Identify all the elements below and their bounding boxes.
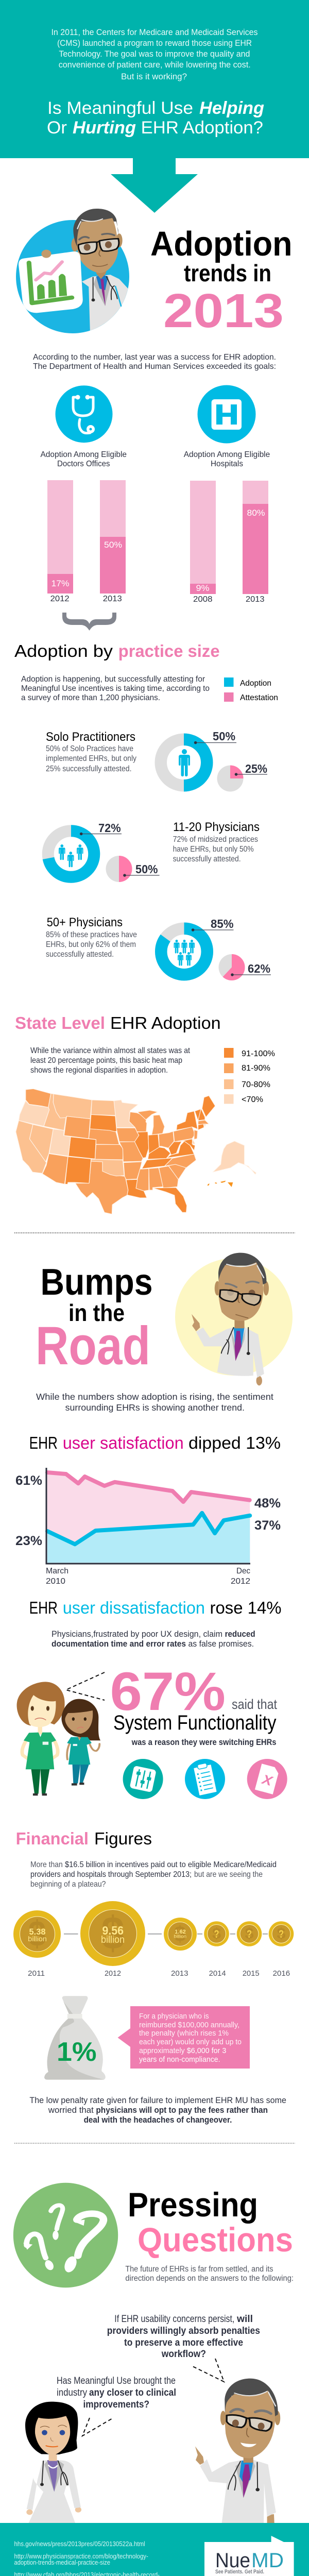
text: question one: If EHR usability concerns persist, xyxy=(114,2314,234,2325)
text: financial intro: More than xyxy=(30,1860,63,1869)
callout pointer: question two xyxy=(82,2418,113,2436)
callout: penalty example xyxy=(117,2006,250,2069)
icon: frowning doctor xyxy=(175,1253,293,1385)
logo: NueMD speech bubble xyxy=(204,2536,294,2576)
text: adoption intro: The Department of Health and Human Services exceeded its goals: xyxy=(33,362,276,371)
coin: 2011: billion xyxy=(28,1935,47,1943)
coin: 2012: billion xyxy=(101,1935,125,1945)
logo: NueMD speech bubble: See Patients. Get Paid. xyxy=(215,2569,264,2575)
coin: 2015: ? xyxy=(247,1928,252,1940)
coin: 2011: $ xyxy=(28,1913,46,1954)
bar chart: hospitals: 2013 xyxy=(246,595,265,604)
chart: 11-20 donut and pie: 72% xyxy=(98,821,121,835)
heading: user satisfaction dipped 13% xyxy=(29,1433,281,1452)
panel: 11-20 physicians xyxy=(48,820,260,882)
brace xyxy=(62,613,116,631)
coin: 2016 xyxy=(269,1921,294,1946)
coin: 2013: billion xyxy=(174,1934,186,1939)
text: practice size intro: Meaningful Use incentives is taking time, according to xyxy=(21,684,210,693)
text: 50+: 85% of these practices have xyxy=(46,930,137,939)
coin: 2011: 5.38 xyxy=(29,1927,45,1937)
coin year labels: 2015 xyxy=(243,1969,260,1978)
bar chart: hospitals: 80% xyxy=(247,508,265,518)
icon: stethoscope xyxy=(56,385,112,443)
text: question one: providers willingly absorb penalties xyxy=(107,2326,260,2336)
text: solo xyxy=(46,730,136,773)
intro paragraph: (CMS) launched a program to reward those using EHR xyxy=(57,38,252,48)
coin year labels: 2016 xyxy=(273,1969,290,1978)
chart: satisfaction line chart: 48% xyxy=(254,1496,281,1511)
text: road intro: While the numbers show adoption is rising, the sentiment xyxy=(36,1392,273,1402)
text: question two: improvements? xyxy=(83,2399,149,2410)
text: practice size intro: Adoption is happening, but successfully attesting for xyxy=(21,675,205,684)
icon: rejected document xyxy=(247,1759,287,1799)
stat: 67 percent system functionality: said that xyxy=(232,1697,277,1712)
callout: penalty example: years of non-compliance. xyxy=(139,2056,220,2064)
text: question two xyxy=(57,2376,176,2410)
label: hospitals: Hospitals xyxy=(211,460,243,468)
chart: solo donut and pie: 25% xyxy=(245,762,267,775)
coin: 2015: $ xyxy=(245,1925,254,1942)
title: main question: Hurting xyxy=(73,118,136,138)
legend: heat map: 91-100% xyxy=(242,1049,275,1058)
coin: 2011 xyxy=(13,1910,61,1958)
heading: pressing questions: Questions xyxy=(138,2221,293,2259)
text: question two: any closer to clinical xyxy=(89,2387,176,2398)
heading: state level ehr adoption: EHR Adoption xyxy=(110,1013,221,1032)
title: main question: EHR Adoption? xyxy=(141,118,263,138)
stat: 67 percent system functionality: was a reason they were switching EHRs xyxy=(131,1737,276,1747)
intro paragraph: Technology. The goal was to improve the quality and xyxy=(59,49,250,59)
icon: female doctor xyxy=(25,2402,81,2523)
coin: 2013: 1.62 xyxy=(175,1929,186,1935)
title: main question xyxy=(47,98,264,138)
coin: 2016: $ xyxy=(277,1925,286,1942)
text: state level intro: While the variance within almost all states was at xyxy=(30,1046,190,1055)
text: road intro xyxy=(36,1392,273,1413)
panel: intro banner xyxy=(0,0,309,158)
panel: solo practitioners xyxy=(46,730,267,791)
callout: penalty example: reimbursed $100,000 annually, xyxy=(139,2021,239,2029)
text: solo: Solo Practitioners xyxy=(46,730,135,744)
coin year labels: 2014 xyxy=(209,1969,226,1978)
title: main question: Is Meaningful Use xyxy=(47,98,193,118)
text: solo: 25% successfully attested. xyxy=(46,765,132,773)
stat: 67 percent system functionality: 67% xyxy=(110,1662,226,1722)
text: low penalty conclusion: deal with the headaches of changeover. xyxy=(84,2115,232,2125)
text: questions intro: The future of EHRs is far from settled, and its xyxy=(125,2265,273,2274)
text: sources: http://www.physicianspractice.com/blog/technology- xyxy=(14,2553,148,2560)
chart: 11-20 donut and pie: 50% xyxy=(135,862,158,876)
text: financial intro: providers and hospitals through September 2013; xyxy=(30,1870,192,1879)
text: adoption intro xyxy=(33,353,276,371)
text: 11-20: 11-20 Physicians xyxy=(173,820,260,834)
heading: pressing questions xyxy=(128,2185,293,2259)
heading: bumps in the road: in the xyxy=(68,1299,125,1326)
chart: incentive coins timeline xyxy=(13,1901,294,1978)
heading: user satisfaction dipped 13%: EHR xyxy=(29,1433,58,1452)
text: question one: to preserve a more effective xyxy=(124,2337,243,2348)
text: solo: implemented EHRs, but only xyxy=(46,754,136,763)
chart: US heat map xyxy=(16,1089,256,1214)
heading: adoption by practice size xyxy=(14,641,220,660)
text: physicians frustrated: Physicians,frustrated by poor UX design, claim xyxy=(52,1630,222,1639)
heading: bumps in the road: Road xyxy=(36,1316,150,1376)
text: adoption intro: According to the number, last year was a success for EHR adoption. xyxy=(33,353,276,362)
text: question one xyxy=(107,2314,260,2360)
icon: hospital xyxy=(198,385,255,443)
callout: penalty example: For a physician who is xyxy=(139,2012,209,2021)
coin: 2012: $ xyxy=(101,1908,125,1959)
label: hospitals xyxy=(184,450,270,468)
heading: adoption by practice size: practice size xyxy=(118,641,220,660)
label: doctors offices xyxy=(40,450,127,468)
chart: satisfaction line chart: 61% xyxy=(15,1473,42,1488)
heading: state level ehr adoption: State Level xyxy=(15,1013,105,1032)
heading: user dissatisfaction rose 14%: EHR xyxy=(29,1598,58,1617)
bar chart: hospitals xyxy=(190,481,268,604)
panel: doctors offices adoption xyxy=(40,385,127,603)
chart: satisfaction line chart: 2010 xyxy=(46,1577,65,1586)
text: 11-20: have EHRs, but only 50% xyxy=(173,845,254,854)
text: solo: 50% of Solo Practices have xyxy=(46,744,133,753)
title: main question: Or xyxy=(47,118,67,138)
callout: penalty example: the penalty (which rises 1% xyxy=(139,2029,229,2038)
text: practice size intro: a survey of more than 1,200 physicians. xyxy=(21,693,160,702)
divider xyxy=(14,2143,295,2144)
text: practice size intro xyxy=(21,675,210,702)
panel: hospitals adoption xyxy=(184,385,270,604)
legend: adoption and attestation: Attestation xyxy=(240,693,278,702)
stat: 67 percent system functionality: System Functionality xyxy=(113,1711,276,1734)
chart: 50+ donut and pie xyxy=(161,917,271,980)
heading: user satisfaction dipped 13%: user satisfaction xyxy=(63,1433,184,1452)
intro paragraph: convenience of patient care, while lowering the cost. xyxy=(59,60,251,70)
text: low penalty conclusion: The low penalty rate given for failure to implement EHR MU has some xyxy=(29,2095,286,2105)
icon: rejected document: X xyxy=(260,1771,275,1789)
chart: satisfaction line chart xyxy=(15,1468,281,1586)
heading: bumps in the road: Bumps xyxy=(40,1262,152,1303)
text: financial intro: but are we seeing the xyxy=(194,1870,263,1879)
bar chart: doctors offices xyxy=(47,480,126,603)
callout: penalty example: $6,000 for 3 xyxy=(187,2047,226,2055)
heading: financial figures xyxy=(16,1829,152,1848)
coin: 2012 xyxy=(80,1901,145,1966)
text: low penalty conclusion: worried that xyxy=(48,2105,94,2115)
text: question one: will xyxy=(236,2314,253,2325)
chart: solo donut and pie xyxy=(161,730,267,791)
icon: money bag with 1 percent xyxy=(44,1996,106,2080)
heading: financial figures: Figures xyxy=(94,1829,152,1848)
legend: heat map: 70-80% xyxy=(242,1080,270,1089)
coin year labels: 2012 xyxy=(105,1969,121,1978)
chart: satisfaction line chart: 2012 xyxy=(231,1577,250,1586)
label: doctors offices: Doctors Offices xyxy=(57,460,110,468)
callout: penalty example: approximately xyxy=(139,2047,185,2055)
bar chart: doctors offices: 17% xyxy=(52,579,69,588)
heading: adoption trends in 2013: 2013 xyxy=(163,284,284,337)
bar chart: doctors offices: 50% xyxy=(104,540,122,550)
text: physicians frustrated xyxy=(52,1630,255,1649)
chart: 11-20 donut and pie xyxy=(48,821,160,882)
chart: satisfaction line chart: 37% xyxy=(254,1518,281,1533)
chart: 50+ donut and pie: 62% xyxy=(248,962,270,975)
intro paragraph xyxy=(52,27,258,81)
callout pointer: question one xyxy=(192,2359,224,2382)
coin: 2014: $ xyxy=(212,1925,221,1942)
coin: 2013 xyxy=(164,1918,197,1951)
chart: satisfaction line chart: 23% xyxy=(15,1534,42,1548)
legend: adoption and attestation: Adoption xyxy=(240,679,271,688)
icon: doctor with chart xyxy=(16,209,131,333)
text: road intro: surrounding EHRs is showing another trend. xyxy=(65,1402,245,1413)
bar chart: doctors offices: 2012 xyxy=(50,595,70,603)
label: doctors offices: Adoption Among Eligible xyxy=(40,450,127,459)
callout pointer: nurses xyxy=(66,1672,105,1700)
coin year labels xyxy=(28,1969,290,1978)
text: question two: industry xyxy=(57,2387,87,2398)
text: 50+: EHRs, but only 62% of them xyxy=(46,940,136,949)
logo: NueMD speech bubble: MD xyxy=(251,2549,284,2572)
text: questions intro xyxy=(125,2265,294,2283)
heading: user dissatisfaction rose 14%: user dissatisfaction xyxy=(63,1598,205,1617)
stat: 67 percent system functionality xyxy=(110,1662,277,1747)
text: 11-20: 72% of midsized practices xyxy=(173,835,258,844)
label: hospitals: Adoption Among Eligible xyxy=(184,450,270,459)
chart: 50+ donut and pie: 85% xyxy=(211,917,234,930)
heading: adoption trends in 2013: Adoption xyxy=(150,225,293,263)
coin: 2015 xyxy=(237,1921,262,1946)
heading: pressing questions: Pressing xyxy=(128,2185,258,2224)
text: 11-20 xyxy=(173,820,260,863)
coin year labels: 2013 xyxy=(171,1969,188,1978)
icon: question marks circle xyxy=(13,2183,118,2287)
text: state level intro: least 20 percentage points, this basic heat map xyxy=(30,1056,182,1065)
icon: smiling doctor xyxy=(195,2379,280,2523)
panel: 50+ physicians xyxy=(46,916,271,980)
intro paragraph: In 2011, the Centers for Medicare and Medicaid Services xyxy=(52,27,258,37)
intro paragraph: But is it working? xyxy=(121,72,187,81)
bar chart: hospitals: 2008 xyxy=(193,595,213,604)
text: 50+ xyxy=(46,916,137,959)
legend: adoption and attestation xyxy=(224,677,278,702)
divider xyxy=(14,1232,295,1233)
text: state level intro xyxy=(30,1046,190,1075)
text: sources: adoption-trends-medical-practice-size xyxy=(14,2559,110,2566)
text: questions intro: direction depends on the answers to the following: xyxy=(125,2274,294,2283)
heading: adoption by practice size: Adoption by xyxy=(14,641,113,660)
chart: solo donut and pie: 50% xyxy=(213,730,235,743)
coin: 2014: ? xyxy=(214,1928,219,1940)
text: financial intro: $16.5 billion in incentives paid out to eligible Medicare/Medicaid xyxy=(65,1860,277,1869)
title: main question: Helping xyxy=(199,98,264,118)
heading: adoption trends in 2013 xyxy=(150,225,293,337)
coin year labels: 2011 xyxy=(28,1969,45,1978)
bar chart: doctors offices: 2013 xyxy=(103,595,122,603)
heading: user dissatisfaction rose 14%: rose 14% xyxy=(210,1598,281,1617)
logo: NueMD speech bubble: Nue xyxy=(215,2549,250,2572)
text: question two: Has Meaningful Use brought the xyxy=(57,2376,176,2386)
text: physicians frustrated: reduced xyxy=(225,1630,255,1639)
text: 50+: successfully attested. xyxy=(46,950,114,959)
icon: sliders xyxy=(123,1759,163,1799)
heading: financial figures: Financial xyxy=(16,1829,89,1848)
text: question one: workflow? xyxy=(161,2349,206,2360)
heading: state level ehr adoption xyxy=(15,1013,221,1032)
text: low penalty conclusion xyxy=(29,2095,286,2125)
text: financial intro: beginning of a plateau? xyxy=(30,1880,106,1889)
chart: satisfaction line chart: March xyxy=(46,1567,68,1575)
heading: user satisfaction dipped 13%: dipped 13% xyxy=(188,1433,281,1452)
text: 11-20: successfully attested. xyxy=(173,855,241,863)
heading: bumps in the road xyxy=(36,1262,152,1376)
icon: clipboard xyxy=(185,1759,225,1799)
callout: penalty example: each year) would only add up to xyxy=(139,2038,242,2046)
coin: 2013: $ xyxy=(174,1922,186,1946)
chart: satisfaction line chart: Dec xyxy=(236,1567,250,1575)
heading: user dissatisfaction rose 14% xyxy=(29,1598,281,1617)
text: sources xyxy=(14,2540,255,2576)
bar chart: hospitals: 9% xyxy=(196,583,209,593)
coin: 2014 xyxy=(204,1921,229,1946)
text: physicians frustrated: as false promises. xyxy=(188,1639,254,1649)
text: 50+: 50+ Physicians xyxy=(47,916,123,929)
heading: adoption trends in 2013: trends in xyxy=(184,260,271,286)
panel: footer xyxy=(0,2523,309,2576)
text: low penalty conclusion: physicians will opt to pay the fees rather than xyxy=(96,2105,268,2115)
text: sources: hhs.gov/news/press/2013pres/05/20130522a.html xyxy=(14,2540,145,2548)
arrow: down from banner xyxy=(111,158,198,213)
coin: 2012: 9.56 xyxy=(102,1924,124,1937)
legend: heat map xyxy=(224,1048,275,1104)
text: financial intro xyxy=(30,1860,277,1889)
icon: money bag with 1 percent: 1% xyxy=(57,2037,97,2067)
text: state level intro: shows the regional disparities in adoption. xyxy=(30,1066,168,1075)
legend: heat map: 81-90% xyxy=(242,1064,270,1073)
legend: heat map: <70% xyxy=(242,1095,263,1104)
coin: 2016: ? xyxy=(279,1928,284,1940)
text: physicians frustrated: documentation time and error rates xyxy=(52,1639,186,1649)
icon: two nurses xyxy=(17,1682,100,1795)
